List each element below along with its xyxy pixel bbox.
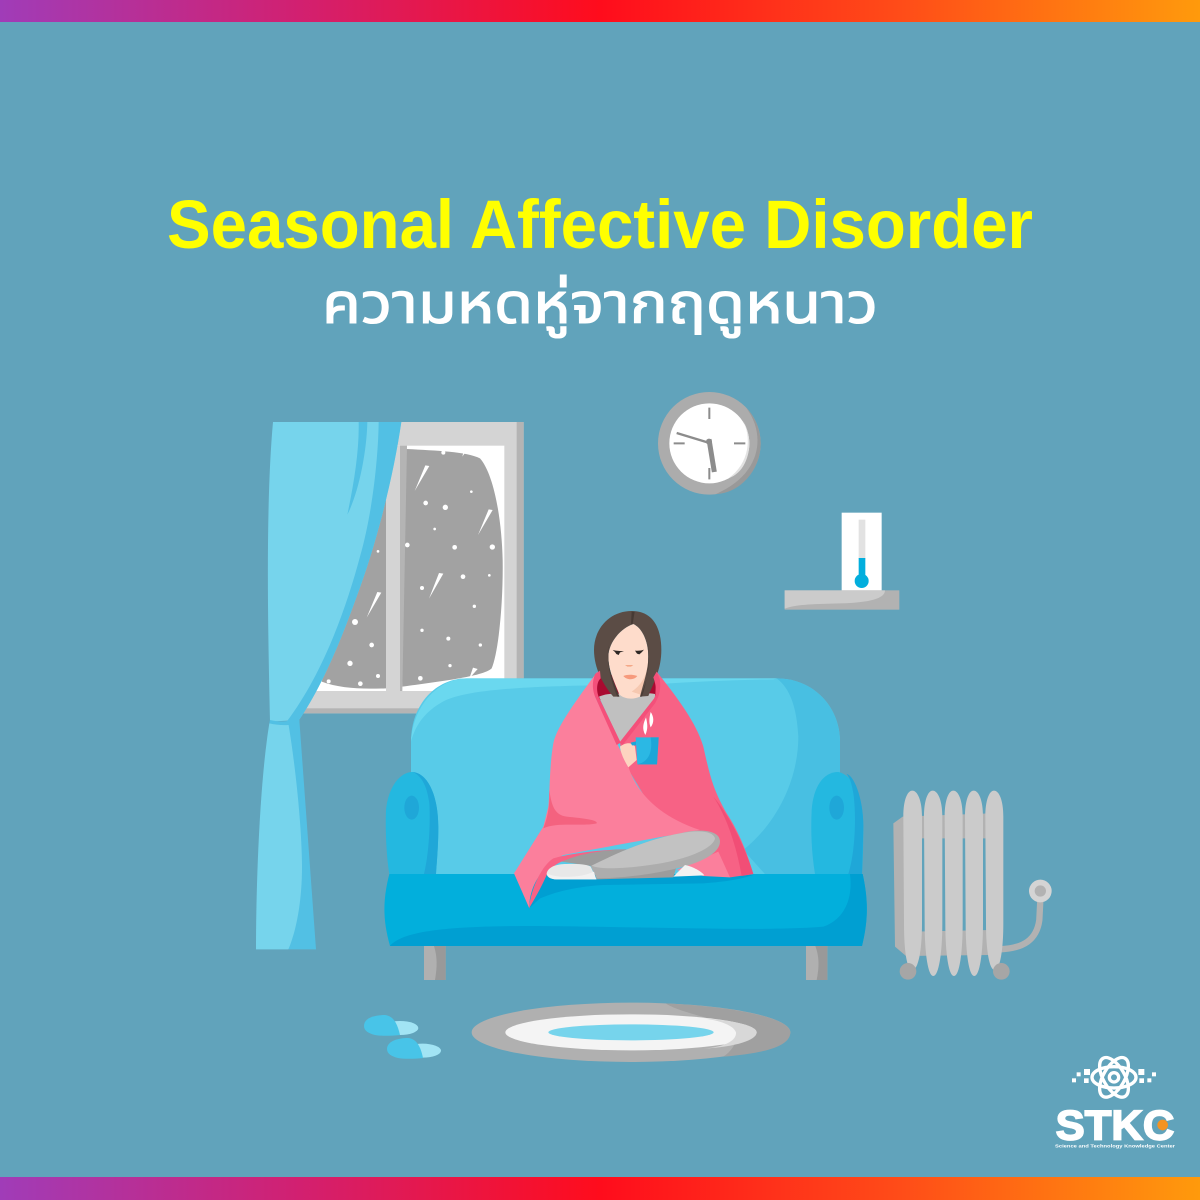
right slipper	[404, 1044, 441, 1058]
top gradient bar	[0, 0, 1200, 22]
radiator fins	[903, 791, 1003, 976]
eyes	[613, 650, 644, 655]
sofa legs	[424, 946, 446, 980]
mouth	[623, 675, 637, 679]
left slipper	[382, 1021, 418, 1035]
logo tagline: Science and Technology Knowledge Center	[1055, 1144, 1175, 1150]
curtain lower part	[256, 719, 316, 949]
hand holding mug	[620, 743, 637, 767]
seat	[384, 874, 867, 946]
snow flakes	[327, 451, 495, 686]
shelf	[785, 590, 899, 610]
nose	[625, 665, 633, 667]
curtain	[268, 422, 401, 722]
seat shadow	[529, 875, 753, 908]
sofa	[384, 678, 867, 980]
thermometer on shelf	[785, 513, 899, 610]
clock ticks	[674, 408, 745, 479]
logo pixels	[1072, 1069, 1156, 1083]
sofa back	[411, 678, 840, 883]
mug	[631, 741, 636, 745]
clock hands	[677, 433, 708, 443]
blanket right side	[620, 672, 753, 877]
feet	[547, 864, 597, 879]
inner collar	[597, 675, 657, 700]
legs	[562, 849, 676, 879]
face and neck	[608, 624, 648, 699]
heading: Thai subtitle: ความหดหู่จากฤดูหนาว	[322, 272, 878, 338]
logo atom icon	[1092, 1053, 1136, 1102]
hair strand	[631, 612, 635, 625]
radiator	[893, 791, 1052, 980]
bottom gradient bar	[0, 1177, 1200, 1200]
clock	[658, 392, 761, 495]
title	[167, 186, 1033, 338]
steam	[643, 712, 653, 735]
STKC logo	[1055, 1053, 1175, 1150]
slippers	[364, 1015, 441, 1059]
shirt	[599, 693, 655, 743]
blanket folds	[543, 790, 597, 828]
power cord	[1000, 893, 1041, 949]
logo dot	[1157, 1120, 1168, 1130]
radiator body	[893, 813, 990, 956]
heading: English title: Seasonal Affective Disorder	[167, 186, 1033, 263]
right arm	[811, 772, 863, 874]
window with snowy view	[273, 422, 524, 713]
hair	[594, 611, 661, 697]
left arm	[386, 772, 438, 874]
radiator feet	[900, 963, 916, 980]
woman wrapped in blanket	[514, 611, 753, 908]
sofa parts lower	[384, 772, 867, 980]
rug	[472, 1003, 790, 1062]
logo wordmark: STKC	[1056, 1102, 1174, 1148]
blanket left side	[514, 672, 700, 908]
